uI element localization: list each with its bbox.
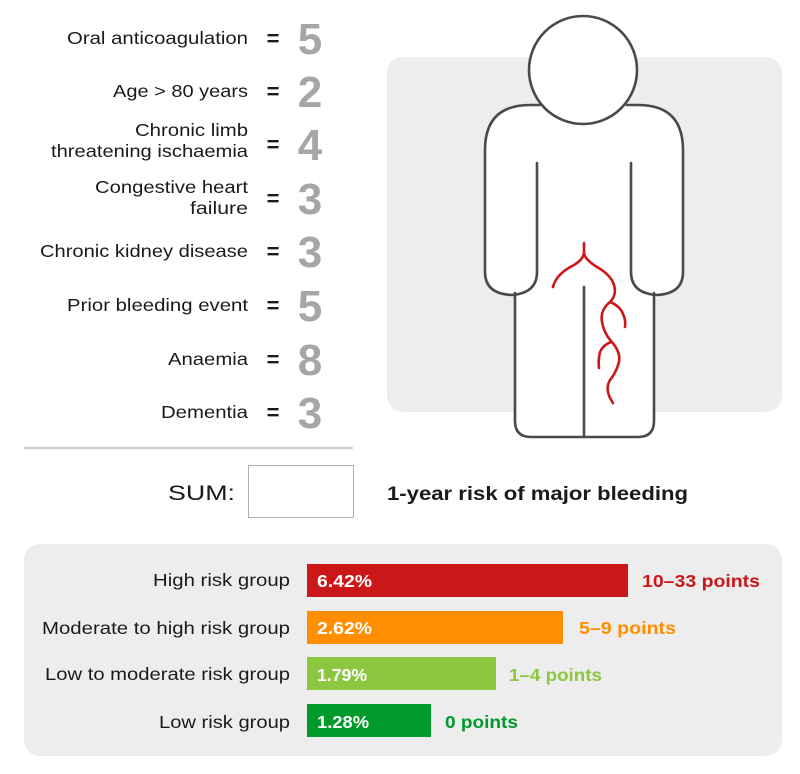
text block: point values: 3	[298, 175, 322, 224]
icon: red blood vessels	[553, 243, 625, 403]
bar chart: 1.79%	[317, 665, 367, 685]
heading: 1-year risk: 1-year risk of major bleeding	[387, 484, 688, 505]
text block: point values	[298, 15, 323, 438]
icon: human body	[485, 16, 683, 437]
panel: risk groups	[24, 544, 782, 756]
text block: equals signs: =	[267, 26, 279, 51]
labels: risk groups: High risk group	[153, 570, 290, 590]
bar chart: 2.62%	[317, 618, 372, 638]
text block: point values: 5	[298, 282, 322, 331]
text block: equals signs	[267, 26, 279, 425]
bar chart: 1–4 points	[509, 665, 602, 685]
text block: risk factors: Anaemia	[168, 349, 248, 369]
labels: risk groups: Moderate to high risk group	[42, 618, 290, 638]
bar chart: 6.42%	[317, 571, 372, 591]
text block: risk factors: Congestive heart	[95, 177, 248, 197]
text block: risk factors: Age > 80 years	[113, 81, 248, 101]
text block: equals signs: =	[267, 132, 279, 157]
text block: risk factors: Prior bleeding event	[67, 295, 248, 315]
labels: risk groups	[42, 570, 290, 732]
text block: point values: 3	[298, 389, 322, 438]
text block: risk factors: failure	[190, 198, 248, 218]
panel: figure background	[387, 57, 782, 412]
sum box	[248, 466, 354, 518]
text block: equals signs: =	[267, 400, 279, 425]
text block: risk factors: Chronic kidney disease	[40, 241, 248, 261]
text block: risk factors: threatening ischaemia	[51, 141, 248, 161]
bar chart	[307, 564, 760, 737]
text block: risk factors: Dementia	[161, 402, 248, 422]
text block: risk factors: Oral anticoagulation	[67, 28, 248, 48]
labels: risk groups: Low risk group	[159, 712, 290, 732]
text block: point values: 5	[298, 15, 322, 64]
sum label: SUM:	[168, 482, 235, 505]
text block: point values: 3	[298, 228, 322, 277]
text block: point values: 8	[298, 336, 322, 385]
text block: equals signs: =	[267, 186, 279, 211]
text block: equals signs: =	[267, 347, 279, 372]
bar chart: 0 points	[445, 712, 518, 732]
text block: equals signs: =	[267, 239, 279, 264]
text block: point values: 4	[298, 121, 323, 170]
bar chart: 1.28%	[317, 712, 369, 732]
text block: risk factors	[40, 28, 248, 422]
text block: risk factors: Chronic limb	[135, 120, 248, 140]
text block: point values: 2	[298, 68, 322, 117]
labels: risk groups: Low to moderate risk group	[45, 664, 290, 684]
text block: equals signs: =	[267, 79, 279, 104]
text block: equals signs: =	[267, 293, 279, 318]
bar chart: 10–33 points	[642, 571, 760, 591]
bar chart: 5–9 points	[579, 618, 676, 638]
